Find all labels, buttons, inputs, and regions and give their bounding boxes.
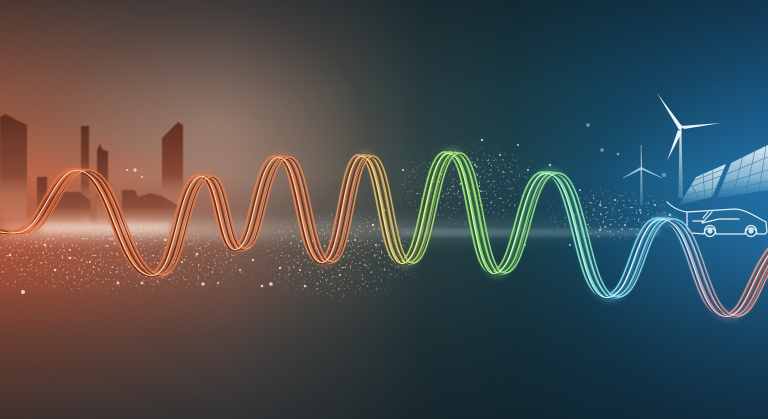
horizon glow band xyxy=(0,222,660,238)
wind turbine: small xyxy=(623,145,662,205)
panel: right xyxy=(717,145,768,198)
city skyline xyxy=(0,114,183,228)
particle speckle field xyxy=(0,142,676,303)
charging cable xyxy=(667,202,687,212)
wheels xyxy=(704,226,716,236)
icon: electric car xyxy=(667,202,767,236)
low-rise buildings xyxy=(37,177,178,228)
solar panels xyxy=(679,145,768,205)
tower: tall right xyxy=(162,122,183,212)
wave strands xyxy=(0,152,768,315)
car body xyxy=(687,209,767,234)
wave highlight xyxy=(0,154,768,316)
tower: slim xyxy=(81,126,89,222)
tower: notched xyxy=(97,144,108,222)
energy wave ribbon xyxy=(0,152,768,318)
wave glow xyxy=(0,153,768,316)
wind turbine: large xyxy=(657,93,721,198)
car window lines xyxy=(693,212,739,223)
tower: left xyxy=(0,114,27,218)
particles xyxy=(9,168,386,294)
panel: left xyxy=(679,164,726,205)
